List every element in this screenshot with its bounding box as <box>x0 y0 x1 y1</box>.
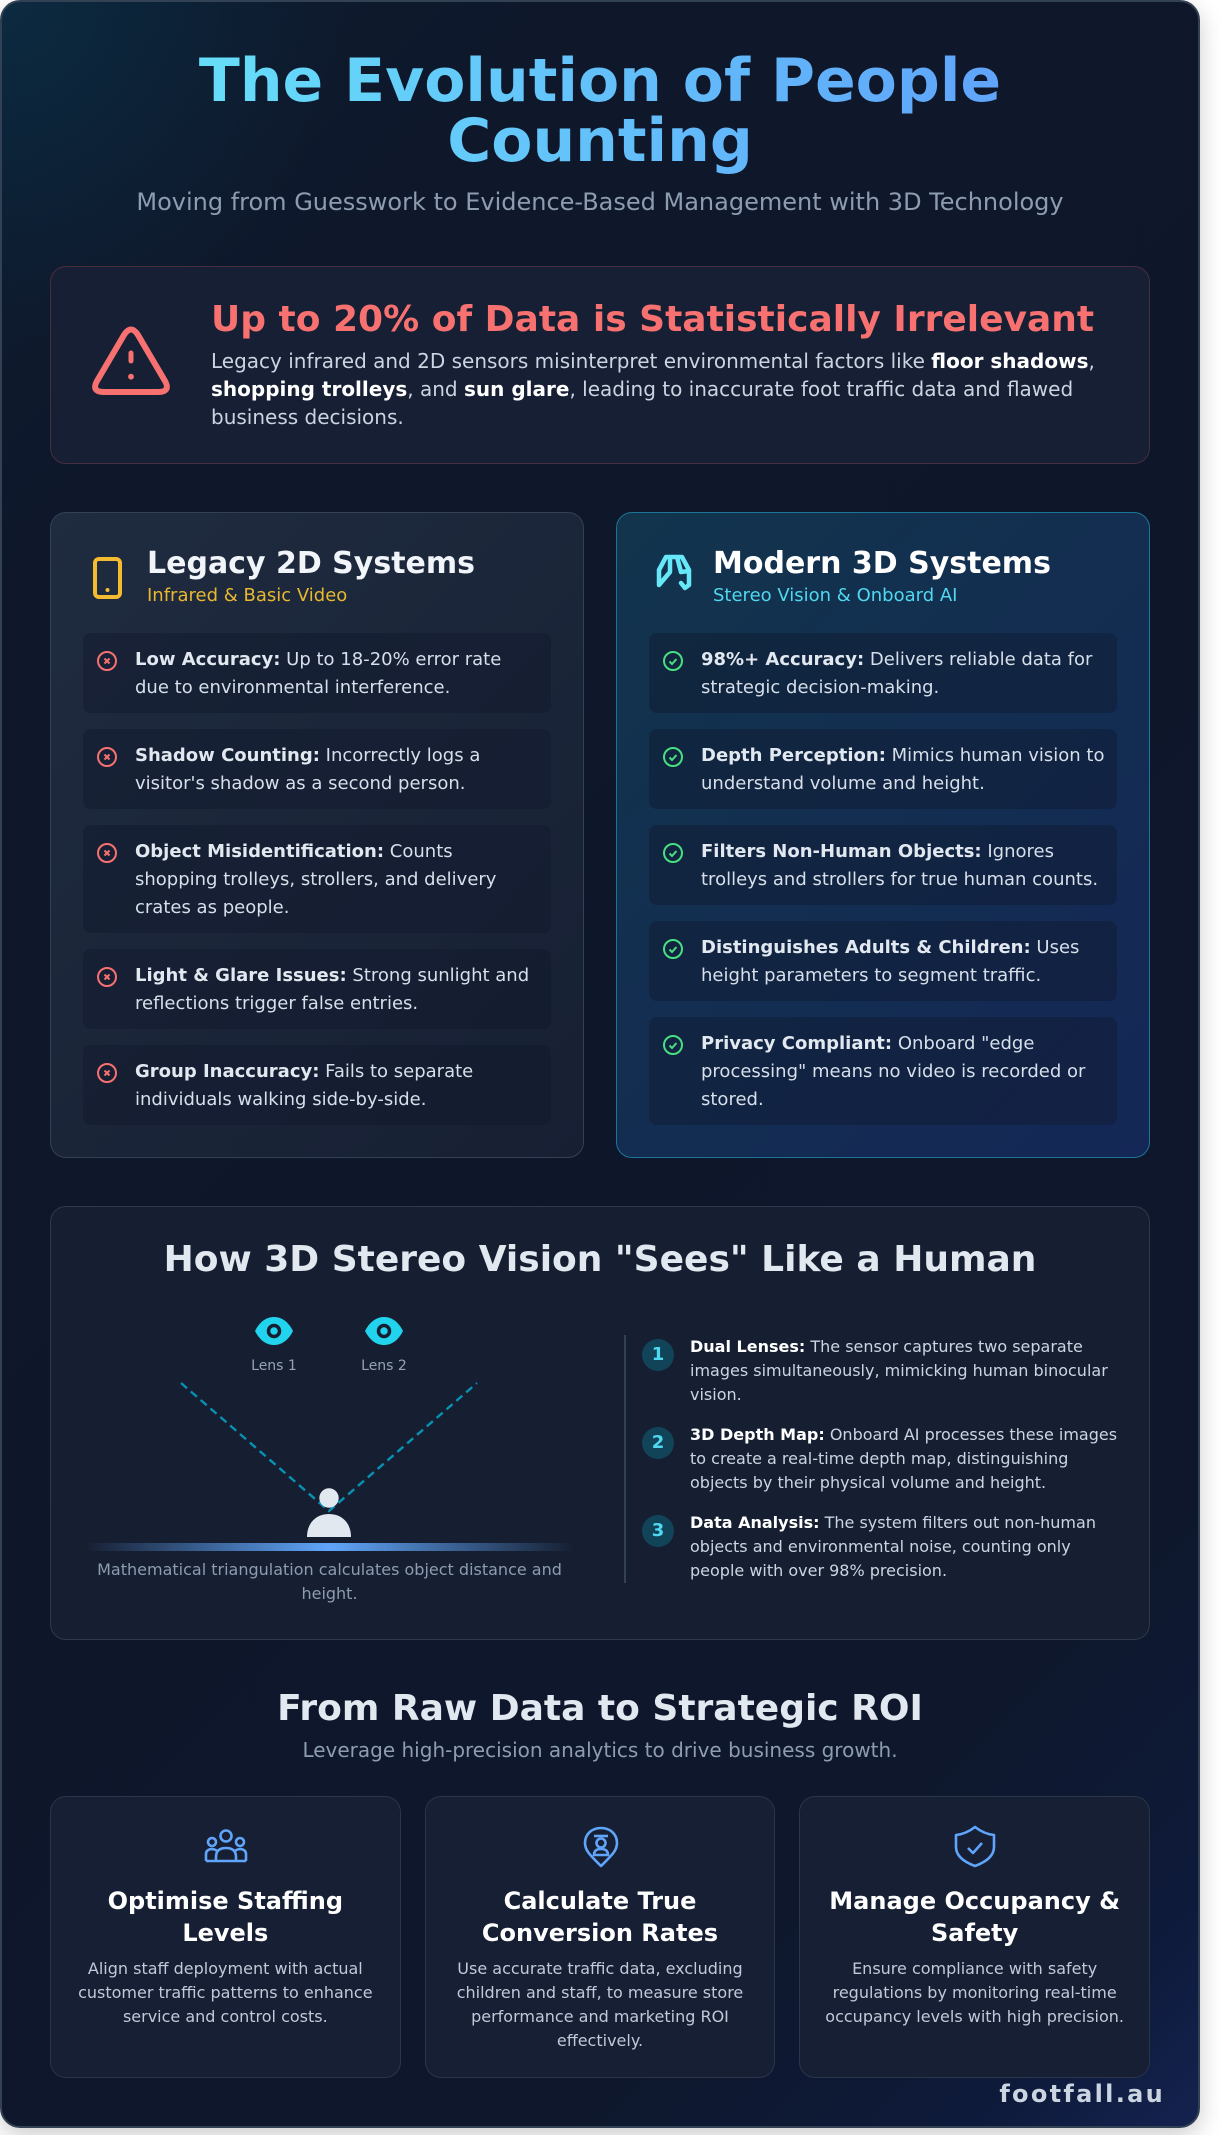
staffing heading: Levels <box>182 1919 268 1947</box>
occupancy heading: Safety <box>931 1919 1018 1947</box>
panel: modern 3D systems <box>616 512 1150 1158</box>
occupancy text <box>825 1959 1124 2026</box>
step 2: 2 <box>652 1432 664 1453</box>
occupancy text: occupancy levels with high precision. <box>825 2007 1124 2026</box>
diagram: triangulation <box>180 1317 478 1537</box>
lens 1 label: Lens 1 <box>251 1358 297 1374</box>
legacy subheading: Infrared & Basic Video <box>147 585 347 606</box>
ground bar <box>85 1543 574 1551</box>
brand mark: footfall.au <box>999 2080 1165 2108</box>
item: low accuracy: Low Accuracy: Up to 18-20% error rate <box>135 649 501 670</box>
icon: lens 1 eye <box>255 1317 293 1345</box>
staffing heading: Optimise Staffing <box>108 1887 343 1915</box>
occupancy text: regulations by monitoring real-time <box>833 1983 1117 2002</box>
step 1: Dual Lenses: The sensor captures two separate <box>690 1337 1083 1356</box>
icon: people group <box>204 1829 248 1862</box>
diagram caption: Mathematical triangulation calculates object distance and <box>97 1560 562 1579</box>
conversion text: children and staff, to measure store <box>457 1983 743 2002</box>
step 2: 3D Depth Map: Onboard AI processes these images <box>690 1425 1117 1444</box>
item: object misidentification: crates as people. <box>135 897 289 918</box>
item: shadow counting: Shadow Counting: Incorrectly logs a <box>135 745 480 766</box>
divider <box>624 1335 626 1583</box>
panel: alert <box>50 266 1150 464</box>
staffing text: Align staff deployment with actual <box>88 1959 363 1978</box>
item: low accuracy <box>83 633 551 713</box>
step 1: vision. <box>690 1385 742 1404</box>
item: depth perception: understand volume and height. <box>701 773 985 794</box>
modern heading: Modern 3D Systems <box>713 546 1051 581</box>
step 3: 3 <box>652 1520 664 1541</box>
section subheading: ROI: Leverage high-precision analytics to drive business growth. <box>302 1738 898 1762</box>
staffing text <box>78 1959 373 2026</box>
staffing text: service and control costs. <box>123 2007 328 2026</box>
item: object misidentification <box>83 825 551 933</box>
panel: how stereo vision works <box>50 1206 1150 1640</box>
item: light and glare: reflections trigger false entries. <box>135 993 418 1014</box>
alert text: business decisions. <box>211 405 404 429</box>
conversion text: Use accurate traffic data, excluding <box>457 1959 743 1978</box>
legacy heading: Legacy 2D Systems <box>147 546 475 581</box>
item: depth perception <box>649 729 1117 809</box>
icon: stereo lenses <box>656 554 692 590</box>
item: light and glare: Light & Glare Issues: Strong sunlight and <box>135 965 529 986</box>
item: non-human filter: trolleys and strollers for true human counts. <box>701 869 1098 890</box>
staffing heading <box>108 1887 343 1947</box>
icon: shield check <box>954 1826 996 1868</box>
item: adults and children: Distinguishes Adults & Children: Uses <box>701 937 1079 958</box>
step 2: objects by their physical volume and height. <box>690 1473 1046 1492</box>
item: adults and children: height parameters to segment traffic. <box>701 965 1041 986</box>
item: shadow counting: visitor's shadow as a second person. <box>135 773 465 794</box>
conversion text: performance and marketing ROI <box>471 2007 729 2026</box>
item: object misidentification: shopping trolleys, strollers, and delivery <box>135 869 496 890</box>
item: privacy: stored. <box>701 1089 764 1110</box>
occupancy heading: Manage Occupancy & <box>829 1887 1120 1915</box>
sight lines <box>181 1383 477 1511</box>
alert text: Legacy infrared and 2D sensors misinterpret environmental factors like floor shadows, <box>211 349 1095 373</box>
item: low accuracy: due to environmental interference. <box>135 677 450 698</box>
title: The Evolution of People <box>199 46 1001 116</box>
alert text <box>211 349 1095 429</box>
alert heading: Up to 20% of Data is Statistically Irrelevant <box>211 299 1094 340</box>
title: Counting <box>447 106 753 176</box>
item: depth perception: Depth Perception: Mimics human vision to <box>701 745 1104 766</box>
diagram caption: height. <box>301 1584 358 1603</box>
step 1: images simultaneously, mimicking human binocular <box>690 1361 1108 1380</box>
item: non-human filter <box>649 825 1117 905</box>
item: accuracy <box>649 633 1117 713</box>
item: accuracy: strategic decision-making. <box>701 677 939 698</box>
step 2 <box>642 1425 1117 1492</box>
occupancy heading <box>829 1887 1120 1947</box>
diagram caption <box>97 1560 562 1603</box>
icon: device <box>93 557 122 599</box>
card: occupancy <box>799 1796 1150 2078</box>
conversion heading: Conversion Rates <box>482 1919 718 1947</box>
step 3 <box>642 1513 1096 1580</box>
conversion text: effectively. <box>557 2031 643 2050</box>
alert text: shopping trolleys, and sun glare, leading to inaccurate foot traffic data and flawed <box>211 377 1073 401</box>
subtitle: Moving from Guesswork to Evidence-Based Management with 3D Technology <box>136 188 1064 216</box>
icon: person <box>307 1488 351 1537</box>
modern subheading: Stereo Vision & Onboard AI <box>713 585 957 606</box>
step 3: people with over 98% precision. <box>690 1561 947 1580</box>
card: staffing <box>50 1796 401 2078</box>
item: light and glare <box>83 949 551 1029</box>
item: privacy: processing" means no video is recorded or <box>701 1061 1085 1082</box>
step 2: to create a real-time depth map, distinguishing <box>690 1449 1068 1468</box>
icon: lens 2 eye <box>365 1317 403 1345</box>
item: object misidentification: Object Misidentification: Counts <box>135 841 453 862</box>
step 3: Data Analysis: The system filters out non-human <box>690 1513 1096 1532</box>
icon: location person <box>584 1826 618 1868</box>
section heading: stereo vision: How 3D Stereo Vision "Sees" Like a Human <box>164 1239 1036 1280</box>
card: conversion <box>425 1796 775 2078</box>
item: group inaccuracy <box>83 1045 551 1125</box>
staffing text: customer traffic patterns to enhance <box>78 1983 373 2002</box>
item: group inaccuracy: Group Inaccuracy: Fails to separate <box>135 1061 473 1082</box>
conversion text <box>457 1959 743 2050</box>
step 1 <box>642 1337 1108 1404</box>
item: non-human filter: Filters Non-Human Objects: Ignores <box>701 841 1054 862</box>
item: privacy <box>649 1017 1117 1125</box>
item: group inaccuracy: individuals walking side-by-side. <box>135 1089 426 1110</box>
occupancy text: Ensure compliance with safety <box>852 1959 1097 1978</box>
item: privacy: Privacy Compliant: Onboard "edge <box>701 1033 1034 1054</box>
lens 2 label: Lens 2 <box>361 1358 407 1374</box>
item: shadow counting <box>83 729 551 809</box>
section heading: ROI: From Raw Data to Strategic ROI <box>277 1688 923 1729</box>
title <box>50 51 1150 191</box>
item: accuracy: 98%+ Accuracy: Delivers reliable data for <box>701 649 1092 670</box>
panel: legacy 2D systems <box>50 512 584 1158</box>
conversion heading: Calculate True <box>504 1887 696 1915</box>
step 3: objects and environmental noise, counting only <box>690 1537 1071 1556</box>
item: adults and children <box>649 921 1117 1001</box>
conversion heading <box>482 1887 718 1947</box>
icon: warning triangle <box>92 326 170 395</box>
step 1: 1 <box>652 1344 664 1365</box>
